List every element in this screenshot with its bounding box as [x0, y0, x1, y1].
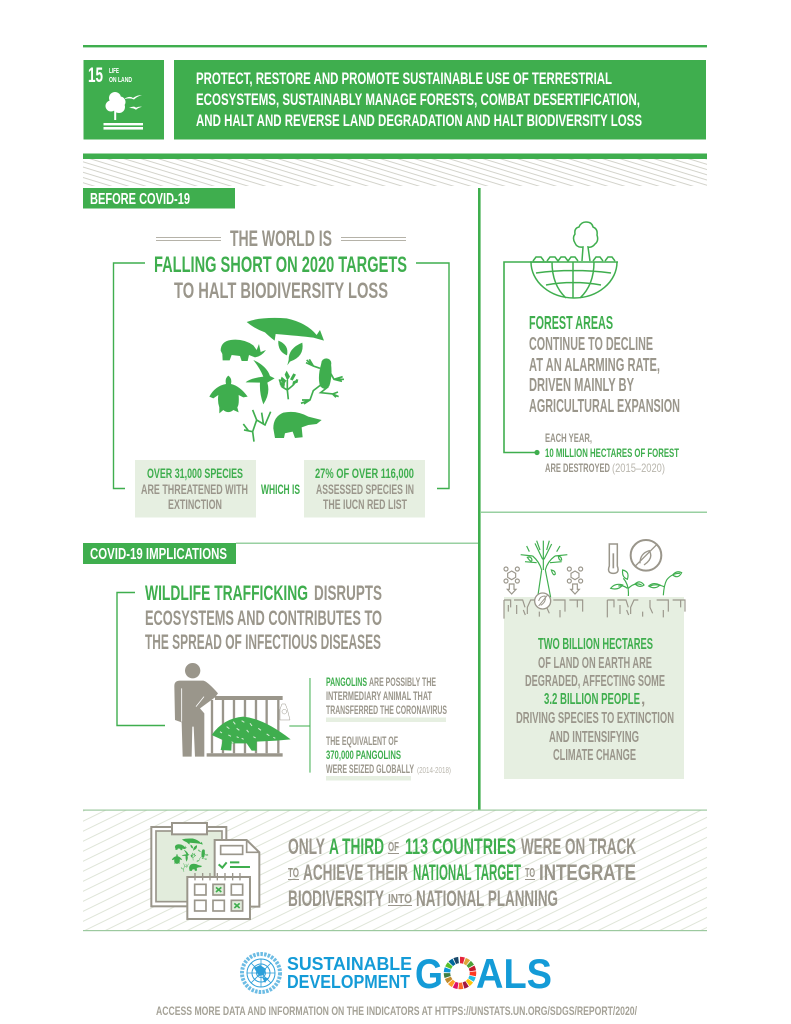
panel: biodiversity targets: [114, 226, 449, 518]
text: forest decline statement: CONTINUE TO DECLINE: [529, 334, 653, 354]
heading: COVID-19 implications: COVID-19 IMPLICATIONS: [90, 546, 227, 563]
callout: IUCN red list share: ASSESSED SPECIES IN: [316, 482, 414, 497]
icon: person beside caged pangolin: [174, 663, 310, 773]
text: which is: WHICH IS: [261, 482, 300, 497]
text: a third of countries on track: NATIONAL TARGET: [413, 860, 521, 885]
text: wildlife trafficking statement: DISRUPTS: [314, 582, 382, 605]
icon: SDG 15 life on land tile: 15: [88, 64, 103, 87]
text: pangolins as intermediary: PANGOLINS: [326, 675, 367, 689]
icon: SDG colour wheel: [442, 955, 478, 991]
text: a third of countries on track: ACHIEVE THEIR: [303, 860, 408, 885]
text: pangolins as intermediary: TRANSFERRED THE CORONAVIRUS: [326, 703, 447, 717]
logo: UN emblem and Sustainable Development Goals: G: [415, 950, 443, 997]
text: 10 million hectares destroyed: (2015–2020): [612, 461, 665, 475]
text: pangolins as intermediary: INTERMEDIARY ANIMAL THAT: [326, 689, 432, 703]
text: forest decline statement: DRIVEN MAINLY BY: [529, 375, 634, 395]
icon: SDG 15 life on land tile: ON LAND: [109, 77, 132, 84]
text: pangolins seized: [326, 734, 451, 780]
text: a third of countries on track: A THIRD: [329, 834, 384, 859]
icon: UN emblem: [242, 954, 280, 992]
text: a third of countries on track: OF: [388, 840, 399, 854]
text: 10 million hectares destroyed: [545, 431, 679, 475]
text: pangolins as intermediary: [326, 675, 447, 722]
text: two billion hectares degraded: 3.2 BILLION PEOPLE: [544, 691, 640, 708]
text: a third of countries on track: ONLY: [288, 834, 325, 859]
text: two billion hectares degraded: AND INTENSIFYING: [549, 729, 639, 746]
icon: clipboard, checklist and calendar: [151, 823, 259, 919]
panel: goal statement banner: PROTECT, RESTORE AND PROMOTE SUSTAINABLE USE OF TERRESTRIAL: [196, 70, 612, 88]
text: a third of countries on track: BIODIVERSITY: [288, 886, 384, 911]
heading: falling short on 2020 targets: [154, 226, 407, 303]
text: wildlife trafficking statement: ECOSYSTEMS AND CONTRIBUTES TO: [145, 607, 382, 630]
icon: cluster of threatened species silhouettes: [209, 318, 344, 442]
text: two billion hectares degraded: TWO BILLION HECTARES: [538, 636, 653, 653]
text: forest decline statement: AT AN ALARMING RATE,: [529, 355, 660, 375]
panel: goal statement banner: [174, 60, 706, 140]
text: wildlife trafficking statement: WILDLIFE TRAFFICKING: [145, 582, 308, 605]
panel: national targets banner: [83, 810, 707, 931]
text: forest decline statement: FOREST AREAS: [529, 313, 613, 333]
text: a third of countries on track: 113 COUNTRIES: [405, 834, 516, 859]
text: pangolins seized: (2014-2018): [417, 766, 451, 775]
text: forest decline statement: [529, 313, 680, 416]
text: 10 million hectares destroyed: ARE DESTROYED: [545, 461, 610, 475]
text: a third of countries on track: INTEGRATE: [539, 860, 636, 885]
text: two billion hectares degraded: [516, 636, 674, 764]
text: pangolins seized: THE EQUIVALENT OF: [326, 734, 398, 748]
text: pangolins seized: 370,000 PANGOLINS: [326, 748, 401, 762]
text: forest decline statement: AGRICULTURAL EXPANSION: [529, 396, 680, 416]
heading: before COVID-19: BEFORE COVID-19: [90, 191, 190, 208]
text: wildlife trafficking statement: THE SPREAD OF INFECTIOUS DISEASES: [145, 631, 381, 654]
heading: falling short on 2020 targets: THE WORLD IS: [230, 226, 332, 251]
logo: UN emblem and Sustainable Development Goals: ALS: [476, 950, 552, 997]
text: two billion hectares degraded: DEGRADED, AFFECTING SOME: [525, 673, 665, 690]
text: a third of countries on track: NATIONAL PLANNING: [416, 886, 558, 911]
text: pangolins as intermediary: ARE POSSIBLY THE: [369, 675, 436, 689]
heading: COVID-19 implications: [83, 543, 236, 564]
logo: UN emblem and Sustainable Development Goals: SUSTAINABLE: [287, 954, 412, 974]
text: pangolins seized: WERE SEIZED GLOBALLY: [326, 762, 414, 776]
text: wildlife trafficking statement: [145, 582, 382, 654]
heading: falling short on 2020 targets: TO HALT BIODIVERSITY LOSS: [174, 278, 388, 303]
icon: degraded land, tree, fertiliser and thermometer: [504, 540, 685, 619]
text: a third of countries on track: [288, 834, 636, 911]
icon: SDG 15 life on land tile: [84, 60, 164, 140]
callout: species threatened: OVER 31,000 SPECIES: [147, 466, 243, 481]
panel: forest areas: [504, 222, 680, 475]
text: two billion hectares degraded: ,: [641, 691, 645, 708]
text: two billion hectares degraded: CLIMATE CHANGE: [553, 747, 636, 764]
text: two billion hectares degraded: OF LAND ON EARTH ARE: [538, 655, 652, 672]
logo: UN emblem and Sustainable Development Goals: [242, 950, 552, 997]
text: 10 million hectares destroyed: 10 MILLION HECTARES OF FOREST: [545, 446, 679, 460]
callout: IUCN red list share: [304, 460, 425, 518]
icon: globe with tree: [530, 222, 618, 298]
text: two billion hectares degraded: DRIVING SPECIES TO EXTINCTION: [516, 710, 674, 727]
text: a third of countries on track: TO: [288, 866, 299, 880]
heading: falling short on 2020 targets: FALLING SHORT ON 2020 TARGETS: [154, 252, 407, 277]
text: a third of countries on track: TO: [525, 866, 535, 880]
callout: species threatened: EXTINCTION: [168, 497, 222, 512]
panel: wildlife trafficking: [117, 582, 451, 780]
callout: species threatened: ARE THREATENED WITH: [141, 482, 248, 497]
text: a third of countries on track: INTO: [388, 892, 412, 906]
callout: IUCN red list share: 27% OF OVER 116,000: [315, 466, 414, 481]
logo: UN emblem and Sustainable Development Goals: DEVELOPMENT: [287, 972, 410, 992]
text: a third of countries on track: WERE ON TRACK: [521, 834, 636, 859]
callout: IUCN red list share: THE IUCN RED LIST: [323, 497, 407, 512]
icon: SDG 15 life on land tile: LIFE: [109, 68, 119, 75]
callout: species threatened: [135, 460, 256, 518]
panel: land degradation: [504, 540, 685, 779]
text: 10 million hectares destroyed: EACH YEAR,: [545, 431, 592, 445]
